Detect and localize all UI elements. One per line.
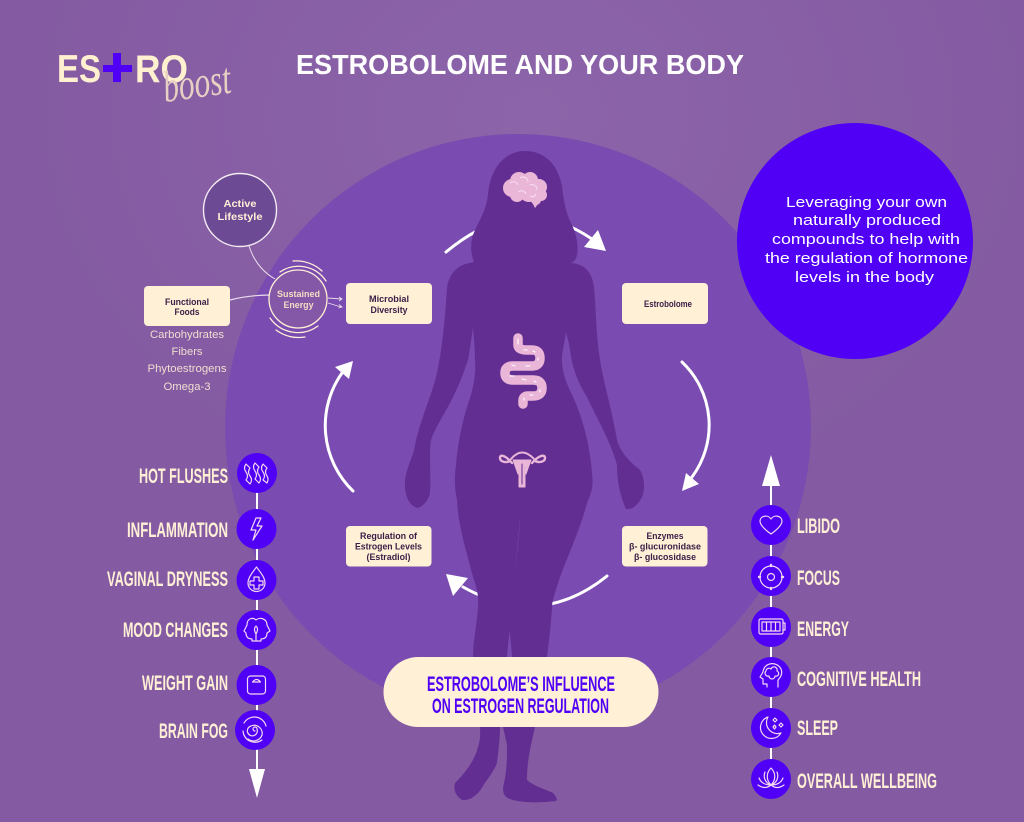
benefit: focus bbox=[751, 556, 840, 596]
callout: blue circle: levels in the body bbox=[795, 269, 935, 286]
box: estrobolome: Estrobolome bbox=[644, 299, 692, 309]
callout: blue circle: naturally produced bbox=[793, 212, 941, 229]
benefit: sleep: SLEEP bbox=[797, 717, 838, 740]
callout: blue circle: Leveraging your own bbox=[786, 194, 947, 211]
symptom arrow down bbox=[249, 473, 265, 798]
box: microbial diversity: Diversity bbox=[370, 305, 408, 315]
circle: active lifestyle: Active bbox=[224, 198, 257, 210]
cycle arrow: bottom bbox=[446, 574, 607, 606]
icon: uterus bbox=[500, 452, 545, 487]
box: functional foods: Functional bbox=[165, 297, 209, 307]
icon: brain bbox=[503, 172, 547, 208]
small arrows to microbial diversity bbox=[328, 297, 342, 308]
benefit arrow up bbox=[762, 455, 780, 779]
callout: blue circle bbox=[737, 123, 973, 359]
symptom: inflammation bbox=[127, 509, 276, 549]
symptom: brain fog bbox=[159, 710, 275, 750]
logo: Estro boost: ES bbox=[57, 48, 101, 91]
box: regulation of estrogen levels: (Estradiol) bbox=[366, 552, 410, 562]
benefit: focus: FOCUS bbox=[797, 567, 840, 590]
cycle arrow: top bbox=[446, 217, 606, 252]
benefit: libido bbox=[751, 505, 840, 545]
benefit: energy: ENERGY bbox=[797, 618, 849, 641]
symptom: hot flushes bbox=[139, 453, 277, 493]
benefit: cognitive health: COGNITIVE HEALTH bbox=[797, 668, 921, 691]
circle: sustained energy bbox=[269, 261, 327, 338]
title: ESTROBOLOME AND YOUR BODY bbox=[296, 49, 744, 80]
circle: sustained energy: Sustained bbox=[277, 289, 320, 300]
box: microbial diversity: Microbial bbox=[369, 294, 409, 304]
benefit: libido: LIBIDO bbox=[797, 515, 840, 538]
benefit: sleep bbox=[751, 708, 838, 748]
circle: sustained energy: Energy bbox=[284, 300, 314, 311]
callout pill: ON ESTROGEN REGULATION bbox=[432, 695, 609, 718]
logo: Estro boost bbox=[57, 48, 235, 112]
food list bbox=[148, 329, 227, 393]
symptom: brain fog: BRAIN FOG bbox=[159, 720, 228, 743]
symptom: weight gain: WEIGHT GAIN bbox=[142, 672, 228, 695]
box: regulation of estrogen levels: Estrogen Levels bbox=[355, 542, 422, 552]
symptom: hot flushes: HOT FLUSHES bbox=[139, 465, 228, 488]
food list: Carbohydrates bbox=[150, 329, 225, 341]
callout pill bbox=[384, 657, 658, 727]
connector: lifestyle to energy bbox=[249, 246, 275, 279]
box: functional foods: Foods bbox=[174, 307, 200, 317]
circle: active lifestyle bbox=[204, 174, 276, 246]
food list: Omega-3 bbox=[164, 381, 210, 393]
box: enzymes: β- glucosidase bbox=[634, 552, 696, 562]
box: estrobolome bbox=[622, 283, 708, 324]
benefit: cognitive health bbox=[751, 657, 921, 697]
cycle arrow: right bbox=[682, 362, 709, 491]
symptom: mood changes: MOOD CHANGES bbox=[123, 619, 228, 642]
symptom: vaginal dryness bbox=[107, 560, 276, 600]
box: enzymes: β- glucuronidase bbox=[629, 542, 701, 552]
box: enzymes bbox=[622, 526, 708, 566]
benefit: overall wellbeing bbox=[751, 759, 937, 799]
icon: intestine bbox=[505, 338, 542, 404]
connector: foods to energy bbox=[230, 295, 270, 300]
callout: blue circle: the regulation of hormone bbox=[765, 250, 968, 267]
box: regulation of estrogen levels: Regulation of bbox=[360, 531, 418, 541]
body silhouette bbox=[405, 151, 644, 802]
food list: Fibers bbox=[172, 346, 203, 358]
symptom: weight gain bbox=[142, 665, 276, 705]
box: enzymes: Enzymes bbox=[646, 531, 684, 541]
callout pill: ESTROBOLOME’S INFLUENCE bbox=[427, 673, 615, 696]
logo: Estro boost: boost bbox=[160, 54, 235, 112]
benefit: overall wellbeing: OVERALL WELLBEING bbox=[797, 770, 937, 793]
benefit: energy bbox=[751, 607, 849, 647]
symptom: vaginal dryness: VAGINAL DRYNESS bbox=[107, 568, 228, 591]
cycle arrow: left bbox=[325, 361, 353, 491]
symptom: inflammation: INFLAMMATION bbox=[127, 519, 228, 542]
callout: blue circle: compounds to help with bbox=[772, 231, 960, 248]
box: regulation of estrogen levels bbox=[346, 526, 432, 566]
box: microbial diversity bbox=[346, 283, 432, 324]
symptom: mood changes bbox=[123, 610, 276, 650]
circle: active lifestyle: Lifestyle bbox=[218, 211, 263, 223]
box: functional foods bbox=[144, 286, 230, 326]
large central circle bbox=[225, 134, 811, 720]
logo: Estro boost: RO bbox=[135, 48, 188, 91]
food list: Phytoestrogens bbox=[148, 363, 227, 375]
